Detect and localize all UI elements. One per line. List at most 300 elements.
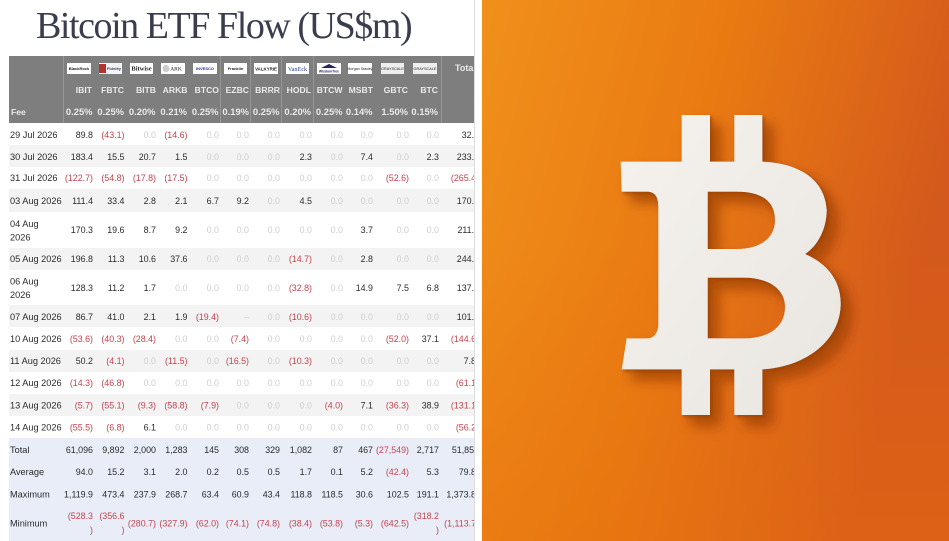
row: 13 Aug 2026: 0.0 <box>237 400 249 410</box>
row: 13 Aug 2026: 13 Aug 2026 <box>10 400 62 410</box>
row: 03 Aug 2026: 0.0 <box>361 196 373 206</box>
row: 14 Aug 2026: 0.0 <box>207 422 219 432</box>
row: 07 Aug 2026: 0.0 <box>331 312 343 322</box>
row: 11 Aug 2026: 0.0 <box>144 356 156 366</box>
row: Maximum: 102.5 <box>387 490 409 500</box>
row: 11 Aug 2026: (11.5) <box>165 356 188 366</box>
row: Minimum: (327.9) <box>159 518 188 528</box>
ticker labels <box>76 64 474 93</box>
row: Minimum: (5.3) <box>355 518 373 528</box>
row: 12 Aug 2026: 0.0 <box>207 378 219 388</box>
row: 31 Jul 2026: (54.8) <box>101 173 125 183</box>
row: 30 Jul 2026: 0.0 <box>268 152 280 162</box>
row: 11 Aug 2026: (4.1) <box>106 356 125 366</box>
row: 04 Aug 2026: 0.0 <box>268 225 280 235</box>
row: 31 Jul 2026: (17.5) <box>164 173 188 183</box>
row: Minimum: (642.5) <box>381 518 409 528</box>
row: 05 Aug 2026: 0.0 <box>207 254 219 264</box>
table header <box>9 56 476 123</box>
row: Maximum: 268.7 <box>165 490 188 500</box>
row: Maximum: 473.4 <box>102 490 125 500</box>
row: 14 Aug 2026: 0.0 <box>361 422 373 432</box>
row: Average: 3.1 <box>144 467 156 477</box>
row: 07 Aug 2026: (10.6) <box>289 312 312 322</box>
row: 30 Jul 2026: 233.9 <box>457 152 479 162</box>
row: 04 Aug 2026: 3.7 <box>361 225 373 235</box>
issuer logos: GRAYSCALE <box>414 67 437 71</box>
row: 10 Aug 2026: (52.0) <box>386 334 409 344</box>
row: 14 Aug 2026: 0.0 <box>397 422 409 432</box>
row: 04 Aug 2026: 8.7 <box>144 225 156 235</box>
issuer logos: Morgan Stanley <box>347 67 373 71</box>
row: Average: (42.4) <box>386 467 409 477</box>
row: Maximum: Maximum <box>10 490 50 500</box>
issuer logos: Bitwise <box>131 66 152 72</box>
ticker labels: BTC <box>420 85 438 95</box>
ticker labels: Total <box>455 63 476 73</box>
row: 12 Aug 2026: (61.1) <box>456 378 479 388</box>
row: 05 Aug 2026: (14.7) <box>289 254 312 264</box>
row: Total: 1,283 <box>165 445 188 455</box>
row: 12 Aug 2026: 0.0 <box>397 378 409 388</box>
row: 10 Aug 2026: 0.0 <box>300 334 312 344</box>
row: Total: 61,096 <box>66 445 93 455</box>
row: 06 Aug 2026: 0.0 <box>331 283 343 293</box>
row: Minimum: (280.7) <box>128 518 156 528</box>
row: Total: 329 <box>265 445 280 455</box>
row: Average: 0.5 <box>237 467 249 477</box>
row: 29 Jul 2026: 0.0 <box>144 130 156 140</box>
row: Minimum: (74.1) <box>226 518 249 528</box>
row: 13 Aug 2026: (36.3) <box>386 400 409 410</box>
row: 31 Jul 2026: 0.0 <box>331 173 343 183</box>
row: Total: 51,857 <box>452 445 479 455</box>
title: Bitcoin ETF Flow (US$m) <box>36 5 411 47</box>
row: 06 Aug 2026: 7.5 <box>397 283 409 293</box>
row: 30 Jul 2026 <box>10 154 474 160</box>
row: Minimum: (528.3 <box>68 511 93 521</box>
row: 04 Aug 2026: 0.0 <box>207 225 219 235</box>
row: 04 Aug 2026: 0.0 <box>427 225 439 235</box>
row: 12 Aug 2026: 0.0 <box>144 378 156 388</box>
ticker labels: FBTC <box>101 85 124 95</box>
row: Maximum: 1,373.8 <box>446 490 476 500</box>
row: 14 Aug 2026: 0.0 <box>175 422 188 432</box>
row: 04 Aug 2026 <box>10 220 474 240</box>
row: 05 Aug 2026: 196.8 <box>71 254 93 264</box>
row: 11 Aug 2026: 0.0 <box>207 356 219 366</box>
ticker labels: ARKB <box>163 85 188 95</box>
row: 10 Aug 2026: (40.3) <box>101 334 125 344</box>
row: 12 Aug 2026: 0.0 <box>300 378 312 388</box>
row: 29 Jul 2026: 89.8 <box>76 130 93 140</box>
row: 11 Aug 2026: 7.8 <box>464 356 476 366</box>
row: 11 Aug 2026: 0.0 <box>268 356 280 366</box>
row: 29 Jul 2026: 0.0 <box>427 130 439 140</box>
row: 29 Jul 2026: 0.0 <box>207 130 219 140</box>
row: 13 Aug 2026: (131.1) <box>451 400 479 410</box>
row: 31 Jul 2026: 0.0 <box>237 173 249 183</box>
row: 13 Aug 2026: (4.0) <box>325 400 343 410</box>
row: 04 Aug 2026: 0.0 <box>331 225 343 235</box>
row: Total <box>10 446 474 455</box>
row: 04 Aug 2026: 04 Aug <box>10 219 39 229</box>
row: 05 Aug 2026: 0.0 <box>237 254 249 264</box>
issuer logos: ARK <box>170 66 182 72</box>
row: Minimum: (62.0) <box>196 518 219 528</box>
issuer logos: INVESCO <box>196 66 214 71</box>
row: 31 Jul 2026: 0.0 <box>427 173 439 183</box>
row: 13 Aug 2026: (7.9) <box>201 400 219 410</box>
row: 03 Aug 2026: 9.2 <box>237 196 249 206</box>
row: 14 Aug 2026: 0.0 <box>331 422 343 432</box>
row: 03 Aug 2026: 2.8 <box>144 196 156 206</box>
row: 30 Jul 2026: 7.4 <box>361 152 373 162</box>
row: Average: 5.3 <box>427 467 439 477</box>
row: 04 Aug 2026: 9.2 <box>175 225 188 235</box>
row: 12 Aug 2026: 12 Aug 2026 <box>10 378 62 388</box>
row: 11 Aug 2026: 0.0 <box>331 356 343 366</box>
row: 04 Aug 2026: 211.5 <box>457 225 479 235</box>
row: 07 Aug 2026: 41.0 <box>107 312 125 322</box>
issuer logos <box>67 63 437 74</box>
row: 07 Aug 2026 <box>10 314 474 322</box>
row: 05 Aug 2026: 0.0 <box>427 254 439 264</box>
row: 07 Aug 2026: 07 Aug 2026 <box>10 312 62 322</box>
row: Total: 145 <box>204 445 219 455</box>
row: 10 Aug 2026: (7.4) <box>231 334 249 344</box>
row: 05 Aug 2026: 2.8 <box>361 254 373 264</box>
row: 10 Aug 2026: 0.0 <box>175 334 188 344</box>
row: 14 Aug 2026: 0.0 <box>268 422 280 432</box>
row: Average: 79.8 <box>459 467 476 477</box>
row: 14 Aug 2026: 0.0 <box>300 422 312 432</box>
row: 29 Jul 2026: 0.0 <box>361 130 373 140</box>
ticker labels: BTCW <box>317 85 343 95</box>
issuer logos: Fidelity <box>107 66 122 71</box>
fee row: 0.20% <box>129 106 156 117</box>
row: 13 Aug 2026: 38.9 <box>422 400 439 410</box>
fee row: Fee <box>11 107 26 117</box>
row: Average: 0.1 <box>331 467 343 477</box>
row: 11 Aug 2026: 11 Aug 2026 <box>10 356 61 366</box>
row: 12 Aug 2026: (46.8) <box>101 378 125 388</box>
table body <box>10 130 479 535</box>
row: 30 Jul 2026: 1.5 <box>175 152 188 162</box>
fee row: 0.21% <box>160 106 188 117</box>
row: 03 Aug 2026: 2.1 <box>175 196 188 206</box>
row: 30 Jul 2026: 183.4 <box>71 152 93 162</box>
row: 30 Jul 2026: 30 Jul 2026 <box>10 152 58 162</box>
row: 13 Aug 2026: (55.1) <box>101 400 125 410</box>
row: 29 Jul 2026: 29 Jul 2026 <box>10 130 58 140</box>
row: 30 Jul 2026: 2.3 <box>300 152 312 162</box>
row: 05 Aug 2026: 0.0 <box>331 254 343 264</box>
row: Maximum: 60.9 <box>232 490 249 500</box>
row: 31 Jul 2026: 0.0 <box>268 173 280 183</box>
row: 04 Aug 2026: 0.0 <box>300 225 312 235</box>
row: Maximum: 43.4 <box>263 490 280 500</box>
row: 31 Jul 2026: (265.4) <box>451 173 479 183</box>
row: Minimum: (356.6 <box>99 511 125 521</box>
row: 07 Aug 2026: 86.7 <box>76 312 93 322</box>
row: 03 Aug 2026: 170.1 <box>457 196 479 206</box>
row: 05 Aug 2026 <box>10 256 474 264</box>
row: 06 Aug 2026: 0.0 <box>175 283 188 293</box>
fee row <box>12 108 438 115</box>
row: 10 Aug 2026 <box>10 336 474 344</box>
row: Average: 0.2 <box>207 467 219 477</box>
row: 10 Aug 2026: 0.0 <box>207 334 219 344</box>
panel: orange bitcoin image <box>482 0 949 541</box>
fee row: 0.14% <box>346 106 373 117</box>
row: 11 Aug 2026: 0.0 <box>361 356 373 366</box>
row: Maximum: 118.8 <box>290 490 312 500</box>
row: 13 Aug 2026: 0.0 <box>300 400 312 410</box>
row: 06 Aug 2026: 2026 <box>10 290 30 300</box>
row: 12 Aug 2026: 0.0 <box>427 378 439 388</box>
row: 05 Aug 2026: 10.6 <box>139 254 156 264</box>
row: Minimum: (53.8) <box>320 518 343 528</box>
fee row: 0.25% <box>192 106 219 117</box>
row: 30 Jul 2026: 0.0 <box>331 152 343 162</box>
fee row: 0.25% <box>66 106 93 117</box>
row: 03 Aug 2026: 0.0 <box>331 196 343 206</box>
row: 14 Aug 2026: (6.8) <box>106 422 125 432</box>
row: Average: 94.0 <box>76 467 93 477</box>
row: 31 Jul 2026: (122.7) <box>65 173 93 183</box>
row: 03 Aug 2026: 0.0 <box>427 196 439 206</box>
row: 29 Jul 2026: (43.1) <box>101 130 125 140</box>
row: 11 Aug 2026: 50.2 <box>76 356 93 366</box>
row: Average <box>10 468 474 477</box>
row: 12 Aug 2026: 0.0 <box>237 378 249 388</box>
row: Maximum: 63.4 <box>202 490 219 500</box>
row: 04 Aug 2026: 19.6 <box>107 225 125 235</box>
row: 05 Aug 2026: 11.3 <box>108 254 125 264</box>
row: 03 Aug 2026: 33.4 <box>107 196 125 206</box>
row: 06 Aug 2026: 6.8 <box>427 283 439 293</box>
row: Total: 308 <box>234 445 249 455</box>
row: Average: 15.2 <box>107 467 125 477</box>
row: 31 Jul 2026: (52.6) <box>386 173 409 183</box>
row: 06 Aug 2026: (32.8) <box>289 283 312 293</box>
row: Minimum: Minimum <box>10 518 48 528</box>
row: 14 Aug 2026: 0.0 <box>237 422 249 432</box>
fee row: 0.19% <box>222 106 250 117</box>
fee row: 0.25% <box>316 106 343 117</box>
row: 13 Aug 2026 <box>10 402 474 410</box>
row: 06 Aug 2026: 0.0 <box>237 283 249 293</box>
row: 10 Aug 2026: 0.0 <box>331 334 343 344</box>
row: Total: 1,082 <box>290 445 312 455</box>
row: Minimum <box>10 511 479 535</box>
row: 06 Aug 2026: 128.3 <box>71 283 93 293</box>
fee row: 1.50% <box>381 106 409 117</box>
row: 13 Aug 2026: (9.3) <box>138 400 156 410</box>
row: 04 Aug 2026: 0.0 <box>397 225 409 235</box>
row: 10 Aug 2026: (53.6) <box>70 334 93 344</box>
row: Minimum: ) <box>90 525 93 535</box>
row: 05 Aug 2026: 0.0 <box>397 254 409 264</box>
row: 05 Aug 2026: 0.0 <box>268 254 280 264</box>
ticker labels: BRRR <box>255 85 281 95</box>
issuer logos: BlackRock <box>69 66 90 71</box>
fee row: 0.25% <box>253 106 280 117</box>
row: 14 Aug 2026: 6.1 <box>144 422 156 432</box>
row: 14 Aug 2026: (55.5) <box>70 422 93 432</box>
row: 03 Aug 2026: 03 Aug 2026 <box>10 196 62 206</box>
row: 05 Aug 2026: 37.6 <box>170 254 188 264</box>
row: Maximum: 30.6 <box>356 490 373 500</box>
row: Minimum: (318.2 <box>414 511 439 521</box>
row: 30 Jul 2026: 0.0 <box>397 152 409 162</box>
issuer logos: WisdomTree <box>319 70 339 74</box>
row: 10 Aug 2026: 10 Aug 2026 <box>10 334 62 344</box>
row: 12 Aug 2026: (14.3) <box>70 378 93 388</box>
row: 29 Jul 2026: (14.6) <box>164 130 188 140</box>
row: 31 Jul 2026: (17.8) <box>133 173 156 183</box>
row: Maximum: 191.1 <box>417 490 439 500</box>
row: 07 Aug 2026: 2.1 <box>144 312 156 322</box>
row: 06 Aug 2026: 14.9 <box>356 283 373 293</box>
row: Average: 0.5 <box>268 467 280 477</box>
row: 30 Jul 2026: 15.5 <box>107 152 125 162</box>
row: 29 Jul 2026: 0.0 <box>300 130 312 140</box>
row: 13 Aug 2026: (5.7) <box>75 400 93 410</box>
ticker labels: HODL <box>287 85 311 95</box>
row: 06 Aug 2026: 137.6 <box>457 283 479 293</box>
row: 10 Aug 2026: (28.4) <box>133 334 156 344</box>
row: 11 Aug 2026: (10.3) <box>289 356 312 366</box>
table row backgrounds <box>9 145 474 541</box>
row: 12 Aug 2026: 0.0 <box>175 378 188 388</box>
ticker labels: BTCO <box>195 85 219 95</box>
ticker labels: MSBT <box>349 85 374 95</box>
fee row: 0.20% <box>284 106 312 117</box>
row: Average: 1.7 <box>300 467 312 477</box>
row: 06 Aug 2026: 0.0 <box>207 283 219 293</box>
row: 07 Aug 2026: 1.9 <box>175 312 188 322</box>
row: Total: (27,549) <box>376 445 409 455</box>
row: 03 Aug 2026: 4.5 <box>300 196 312 206</box>
row: 30 Jul 2026: 20.7 <box>139 152 156 162</box>
icon: white bitcoin symbol <box>621 115 841 415</box>
row: Minimum: ) <box>436 525 439 535</box>
ticker labels: GBTC <box>384 85 408 95</box>
row: 14 Aug 2026: 0.0 <box>427 422 439 432</box>
row: 07 Aug 2026: 101.3 <box>457 312 479 322</box>
row: 10 Aug 2026: 0.0 <box>268 334 280 344</box>
row: Total: 87 <box>333 445 343 455</box>
row: 31 Jul 2026 <box>10 174 474 183</box>
row: 10 Aug 2026: (144.6) <box>451 334 479 344</box>
row: 04 Aug 2026: 170.3 <box>71 225 93 235</box>
issuer logos: VanEck <box>288 66 308 73</box>
row: 31 Jul 2026: 0.0 <box>207 173 219 183</box>
row: 04 Aug 2026: 2026 <box>10 232 30 242</box>
panel: ETF flow table <box>9 56 479 541</box>
issuer logos: GRAYSCALE <box>381 67 404 71</box>
row: 07 Aug 2026: 0.0 <box>397 312 409 322</box>
row: Total: 2,717 <box>417 445 439 455</box>
row: Maximum <box>10 491 474 499</box>
row: Total: 467 <box>358 445 373 455</box>
row: 12 Aug 2026: 0.0 <box>268 378 280 388</box>
ticker labels: BITB <box>136 85 156 95</box>
issuer logos: Franklin <box>228 66 244 71</box>
row: Minimum: (38.4) <box>289 518 312 528</box>
row: Maximum: 237.9 <box>134 490 156 500</box>
row: 07 Aug 2026: 0.0 <box>268 312 280 322</box>
row: 29 Jul 2026: 32.7 <box>462 130 479 140</box>
row: 30 Jul 2026: 0.0 <box>237 152 249 162</box>
row: Maximum: 1,119.9 <box>64 490 93 500</box>
row: 11 Aug 2026: 0.0 <box>397 356 409 366</box>
row: Total: Total <box>10 445 29 455</box>
row: 06 Aug 2026: 06 Aug <box>10 276 39 286</box>
row: 07 Aug 2026: 0.0 <box>427 312 439 322</box>
row: 31 Jul 2026: 0.0 <box>300 173 312 183</box>
row: 29 Jul 2026: 0.0 <box>397 130 409 140</box>
row: 06 Aug 2026: 1.7 <box>144 283 156 293</box>
row: 11 Aug 2026 <box>10 358 474 366</box>
issuer logos: VALKYRIE <box>255 66 277 72</box>
row: 13 Aug 2026: (58.8) <box>164 400 188 410</box>
row: Maximum: 118.5 <box>321 490 343 500</box>
row: 07 Aug 2026: 0.0 <box>361 312 373 322</box>
row: 29 Jul 2026 <box>10 132 474 140</box>
row: 14 Aug 2026: 14 Aug 2026 <box>10 422 62 432</box>
row: Total: 2,000 <box>134 445 156 455</box>
row: 03 Aug 2026: 6.7 <box>207 196 219 206</box>
row: 06 Aug 2026 <box>10 278 474 298</box>
row: 03 Aug 2026 <box>10 198 474 206</box>
row: 06 Aug 2026: 0.0 <box>268 283 280 293</box>
row: 11 Aug 2026: (16.5) <box>226 356 249 366</box>
row: 05 Aug 2026: 244.4 <box>457 254 479 264</box>
row: 03 Aug 2026: 0.0 <box>397 196 409 206</box>
row: 30 Jul 2026: 0.0 <box>207 152 219 162</box>
row: Minimum: (74.8) <box>257 518 280 528</box>
row: 29 Jul 2026: 0.0 <box>237 130 249 140</box>
row: Minimum: (1,113.7) <box>444 518 479 528</box>
row: 03 Aug 2026: 0.0 <box>268 196 280 206</box>
row: 30 Jul 2026: 2.3 <box>427 152 439 162</box>
row: Average: 5.2 <box>361 467 373 477</box>
row: 10 Aug 2026: 37.1 <box>422 334 439 344</box>
row: 07 Aug 2026: (19.4) <box>196 312 219 322</box>
ticker labels: EZBC <box>226 85 249 95</box>
row: 13 Aug 2026: 0.0 <box>268 400 280 410</box>
row: 13 Aug 2026: 7.1 <box>361 400 373 410</box>
row: 04 Aug 2026: 0.0 <box>237 225 249 235</box>
row: 06 Aug 2026: 11.2 <box>108 283 125 293</box>
row: 05 Aug 2026: 05 Aug 2026 <box>10 254 62 264</box>
row: Average: Average <box>10 467 44 477</box>
row: 31 Jul 2026: 31 Jul 2026 <box>10 173 58 183</box>
row: 31 Jul 2026: 0.0 <box>361 173 373 183</box>
row: 14 Aug 2026: (56.2) <box>456 422 479 432</box>
row: 14 Aug 2026 <box>10 424 474 432</box>
row: Minimum: ) <box>122 525 125 535</box>
row: 12 Aug 2026 <box>10 380 474 388</box>
ticker labels: IBIT <box>76 85 93 95</box>
fee row: 0.15% <box>411 106 439 117</box>
row: Total: 9,892 <box>102 445 125 455</box>
row: 29 Jul 2026: 0.0 <box>268 130 280 140</box>
row: 10 Aug 2026: 0.0 <box>361 334 373 344</box>
